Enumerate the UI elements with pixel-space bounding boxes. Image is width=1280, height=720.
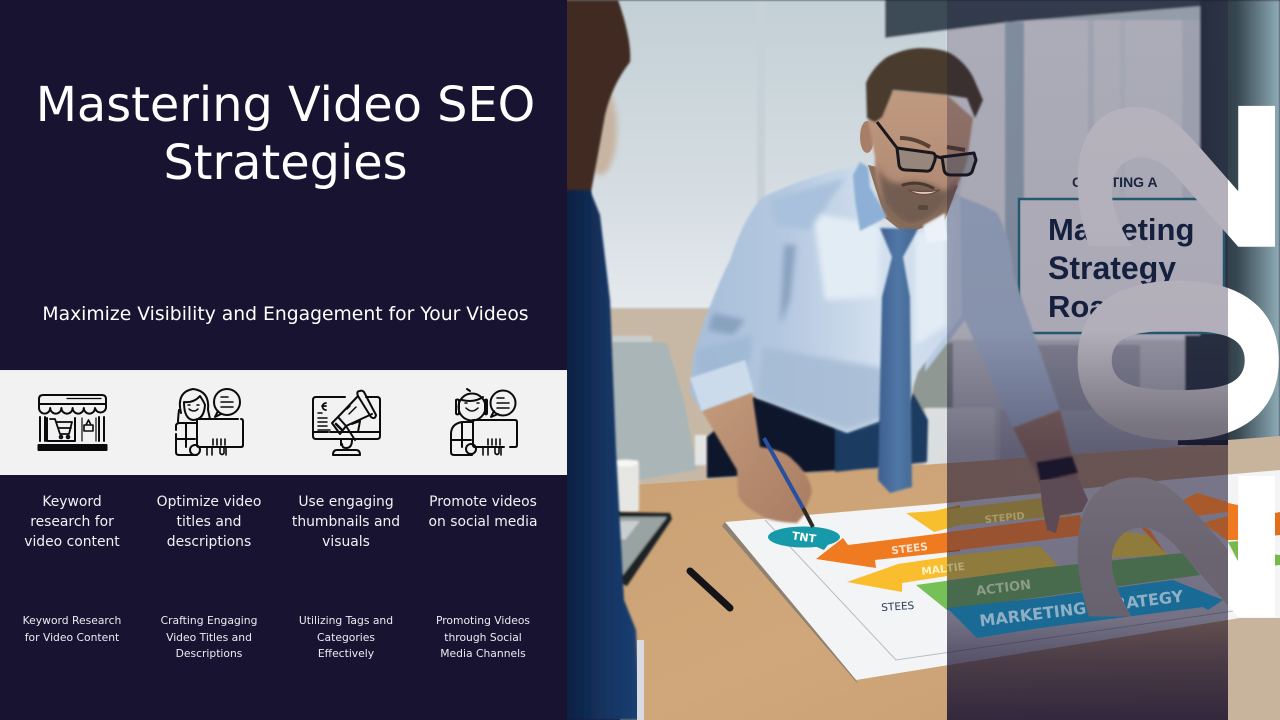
roadmap chart seen through the overlay band: ACTION <box>975 578 1032 599</box>
upper right colour blocks <box>1228 503 1238 540</box>
photo: man reviewing a marketing roadmap with overlay and large year numerals <box>567 0 1280 720</box>
feature label: social promotion: on social media <box>428 514 538 530</box>
shirt torso and near arm <box>690 165 962 433</box>
poster on the back wall: Roadmap <box>1048 289 1189 324</box>
feature label: optimize titles <box>157 494 261 550</box>
icon: monitor with megaphone <box>313 391 380 455</box>
beard <box>877 165 960 225</box>
feature label: social promotion: Promote videos <box>429 494 537 510</box>
black pen on the table <box>690 571 730 608</box>
caption: engaging titles <box>161 614 257 660</box>
orange arrow <box>816 531 960 568</box>
icon: online store with cart <box>38 395 106 450</box>
title: Strategies <box>163 136 408 191</box>
near forearm and hand <box>702 393 812 523</box>
strategy roadmap paper: STEES <box>881 600 915 614</box>
caption: engaging titles: Video Titles and <box>166 631 252 644</box>
trousers <box>707 393 928 478</box>
left panel <box>0 0 567 720</box>
caption: social channels <box>436 614 530 660</box>
far forearm and watch <box>1013 410 1078 482</box>
cuff <box>690 360 754 412</box>
strategy roadmap paper: STEES <box>891 541 929 557</box>
tie <box>878 228 918 493</box>
woman in the foreground <box>560 0 644 720</box>
title <box>36 78 535 191</box>
teal bubble <box>768 526 840 550</box>
far arm and shoulder <box>925 195 1060 428</box>
caption: tags and categories: Categories <box>317 631 375 644</box>
mustache and smile <box>903 183 940 210</box>
roadmap chart seen through the overlay band: MARKETING STRATEGY <box>978 587 1185 630</box>
feature label: keyword research: Keyword <box>42 494 102 510</box>
feature label: optimize titles: descriptions <box>167 534 251 550</box>
caption: tags and categories: Effectively <box>318 647 374 660</box>
strategy roadmap paper <box>722 470 1280 684</box>
shirt collar <box>853 162 947 243</box>
feature label: social promotion <box>428 494 538 530</box>
caption: social channels: through Social <box>444 631 522 644</box>
feature label: optimize titles: Optimize video <box>157 494 261 510</box>
feature label: keyword research <box>24 494 120 550</box>
feature label: engaging thumbnails: thumbnails and <box>292 514 400 530</box>
roadmap chart seen through the overlay band: STEPID <box>984 511 1025 526</box>
yellow arrow <box>847 555 960 592</box>
feature label: keyword research: research for <box>30 514 114 530</box>
poster on the back wall <box>1019 174 1224 333</box>
office background: wall, window and furniture <box>560 0 1280 488</box>
eyebrows <box>900 138 965 150</box>
table top <box>620 436 1280 720</box>
icon: man with headset at laptop with speech bubble <box>451 389 517 455</box>
title: Mastering Video SEO <box>36 78 535 133</box>
hair <box>560 0 630 197</box>
caption: tags and categories <box>299 614 393 660</box>
shirt shading and folds <box>697 178 947 430</box>
icon: woman at laptop with speech bubble <box>176 389 243 455</box>
icon strip <box>0 370 567 475</box>
hair <box>866 48 983 122</box>
icons row <box>38 388 518 456</box>
glasses <box>877 122 976 175</box>
green band <box>916 579 960 610</box>
poster on the back wall: CREATING A <box>1072 174 1158 190</box>
jacket <box>560 190 640 720</box>
caption: engaging titles: Crafting Engaging <box>161 614 257 627</box>
mug on the table <box>612 460 639 512</box>
feature label: engaging thumbnails: Use engaging <box>298 494 394 510</box>
feature label: engaging thumbnails: visuals <box>322 534 370 550</box>
man leaning over the table <box>690 48 1078 527</box>
caption: keyword research: for Video Content <box>25 631 119 644</box>
neck <box>868 165 958 234</box>
caption: keyword research <box>23 614 121 644</box>
feature label: keyword research: video content <box>24 534 120 550</box>
caption: social channels: Media Channels <box>440 647 526 660</box>
blue pencil <box>764 438 813 527</box>
feature label: optimize titles: titles and <box>177 514 241 530</box>
poster on the back wall: Marketing <box>1048 212 1194 247</box>
top band of chart <box>906 505 960 532</box>
caption: social channels: Promoting Videos <box>436 614 530 627</box>
ear <box>860 121 874 153</box>
face <box>868 90 973 225</box>
feature label: engaging thumbnails <box>292 494 400 550</box>
poster on the back wall: Strategy <box>1048 250 1176 286</box>
strategy roadmap paper: MAL <box>921 563 948 578</box>
caption: engaging titles: Descriptions <box>176 647 242 660</box>
roadmap chart seen through the overlay band: TIE <box>946 561 965 575</box>
subtitle: Maximize Visibility and Engagement for Your Videos <box>42 304 529 325</box>
roadmap chart seen through the overlay band <box>947 479 1228 638</box>
tablet on the table <box>612 512 672 586</box>
man's far hand over the chart <box>1040 478 1088 533</box>
translucent overlay band <box>947 0 1228 720</box>
caption: tags and categories: Utilizing Tags and <box>299 614 393 627</box>
teal bubble: TNT <box>791 529 817 546</box>
face sliver <box>583 85 617 175</box>
caption: keyword research: Keyword Research <box>23 614 121 627</box>
